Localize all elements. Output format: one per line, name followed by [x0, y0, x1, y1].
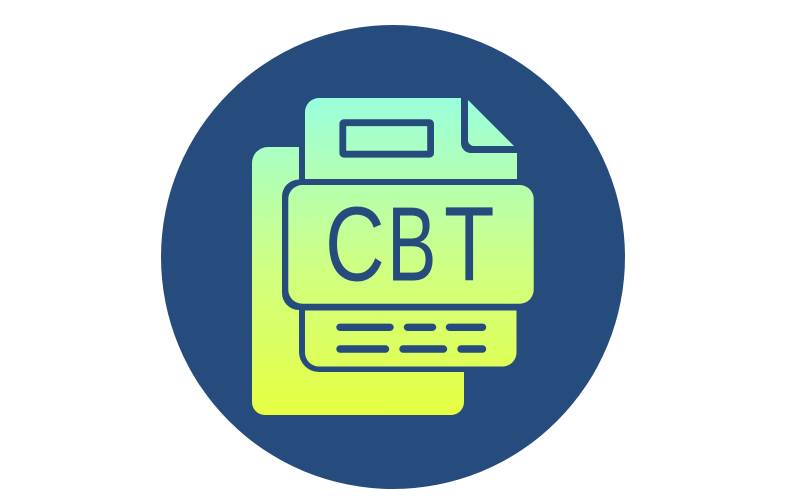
- label text: CBT: C: [325, 186, 385, 304]
- icon: folded corner: [468, 100, 514, 146]
- label text: CBT: [325, 185, 495, 304]
- icon: back document sheet: [252, 147, 464, 415]
- icon: title rectangle: [343, 123, 431, 154]
- label panel with CBT: [288, 185, 534, 304]
- icon: front document bottom with text lines: [305, 310, 517, 366]
- icon: front document top with folded corner: [305, 98, 517, 179]
- label text: CBT: T: [444, 186, 495, 304]
- label text: CBT: B: [387, 185, 436, 304]
- text lines: [340, 327, 482, 349]
- background circle: [161, 25, 625, 489]
